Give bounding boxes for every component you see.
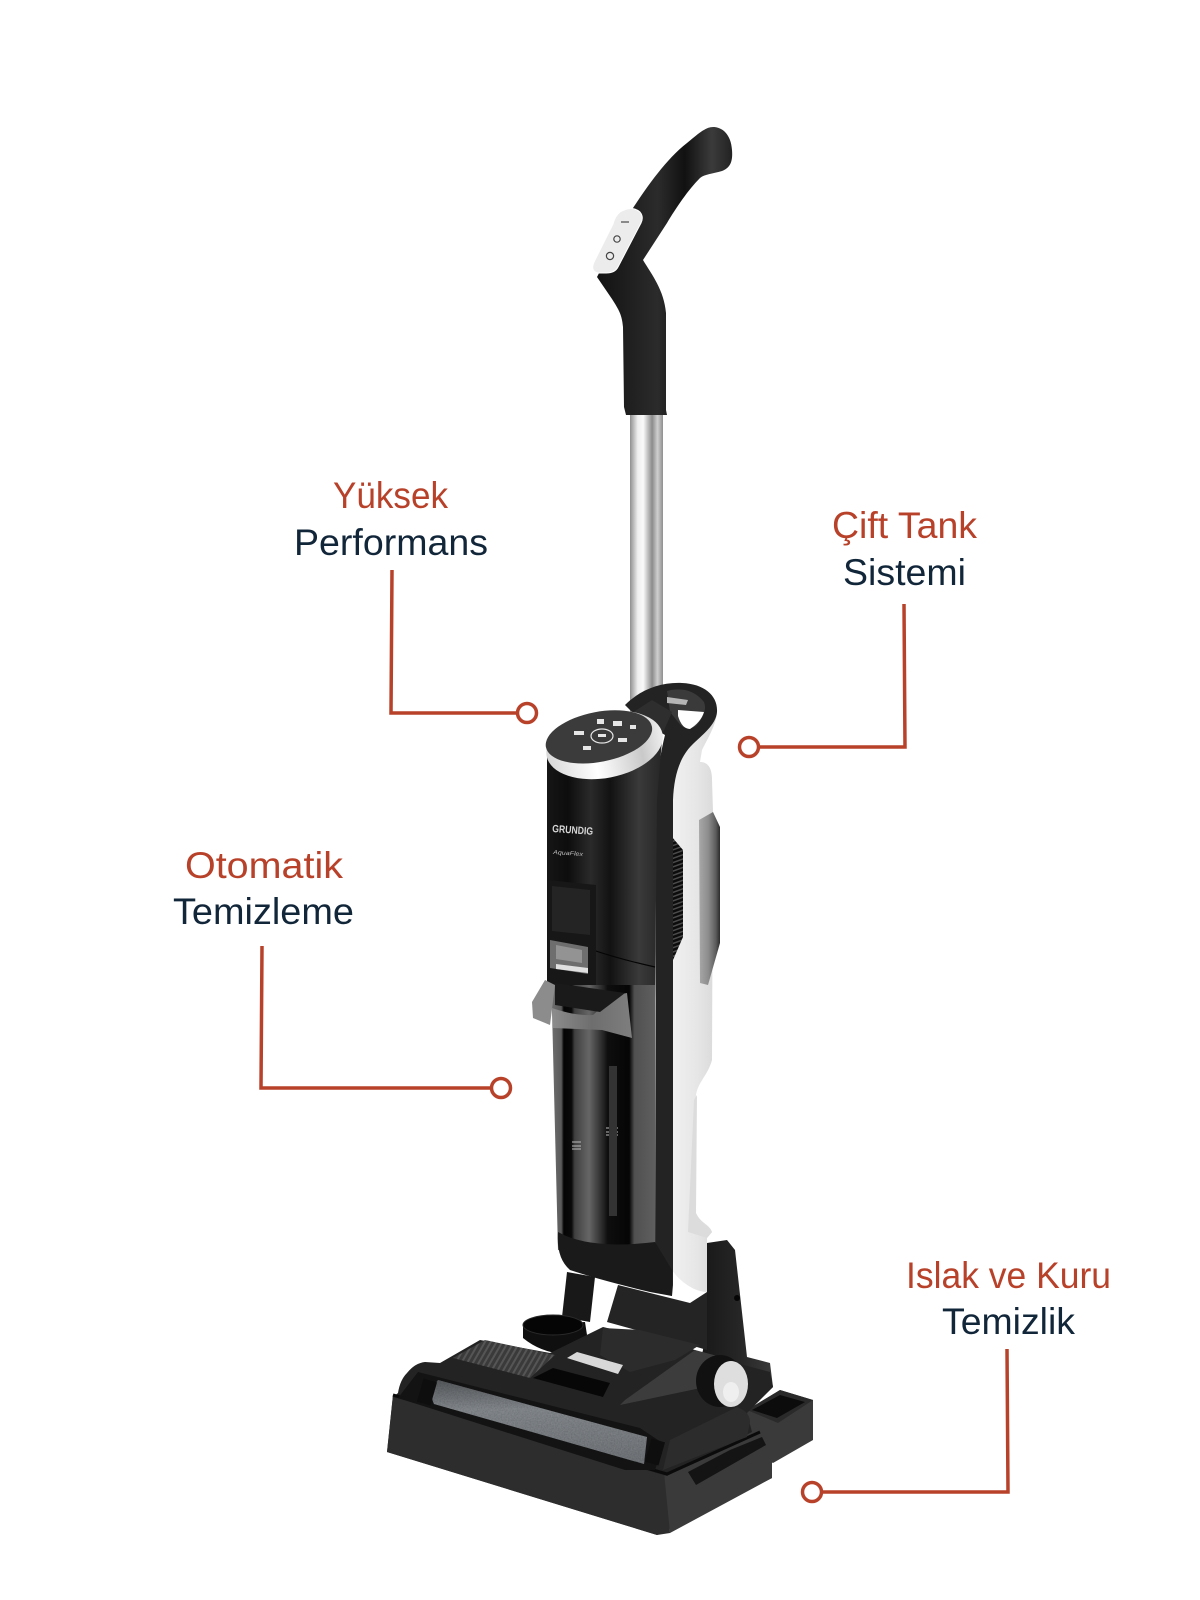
white rear housing: [668, 712, 717, 1292]
accessory cup: [523, 1315, 587, 1354]
callout heading: Otomatik: [185, 844, 343, 886]
roller front frame: [398, 1372, 664, 1470]
handle control panel: [593, 208, 642, 273]
callout: Otomatik Temizleme: [173, 844, 510, 1098]
main motor body: [547, 740, 662, 1000]
product line text: AquaFlex: [552, 850, 584, 858]
pedal arm: [620, 1350, 725, 1405]
handle grip: [597, 127, 732, 415]
rear neck: [562, 1272, 595, 1322]
head textured panel: [453, 1340, 555, 1378]
callout: Çift Tank Sistemi: [740, 504, 977, 756]
lower back contour: [688, 1095, 712, 1238]
right side accessory tray: [747, 1390, 813, 1463]
cleaning head: [393, 1327, 773, 1476]
brush slot: [533, 1368, 610, 1397]
carrying loop and spine: [625, 683, 717, 1296]
leader line with marker: [391, 570, 536, 722]
callout subheading: Performans: [294, 521, 488, 563]
callout: Yüksek Performans: [294, 474, 536, 722]
tank scale marks: [572, 1128, 618, 1149]
callout heading: Çift Tank: [832, 504, 977, 546]
front panel and gauge: [548, 880, 596, 992]
callout subheading: Temizlik: [942, 1300, 1075, 1342]
brand text: GRUNDIG: [552, 823, 594, 838]
silver plate: [567, 1352, 623, 1374]
head front hump: [663, 1407, 750, 1470]
clear water tank: [552, 985, 655, 1270]
body top control ring: [540, 700, 669, 789]
callout subheading: Sistemi: [843, 551, 966, 593]
body seam: [553, 935, 655, 967]
vacuum cleaner product illustration: [387, 127, 813, 1535]
head neck cover: [600, 1328, 700, 1372]
telescopic metal pole: [630, 415, 663, 725]
cleaning roller: [432, 1380, 647, 1464]
base tray: [387, 1395, 772, 1535]
tank inner tube: [609, 1066, 617, 1216]
leader line with marker: [740, 604, 905, 756]
side wheel: [696, 1355, 748, 1407]
callout: Islak ve Kuru Temizlik: [802, 1254, 1111, 1502]
leader line with marker: [261, 946, 510, 1098]
callout heading: Yüksek: [333, 474, 448, 516]
leader line with marker: [802, 1349, 1008, 1502]
tank holder tray: [532, 980, 632, 1038]
rear water tank window: [699, 812, 720, 985]
ventilation grille: [672, 837, 683, 960]
docking stand tower: [690, 1240, 773, 1412]
roller end caps: [417, 1379, 665, 1465]
callout subheading: Temizleme: [173, 890, 354, 932]
center joint neck: [607, 1285, 707, 1350]
base tray rim and handle: [393, 1395, 766, 1485]
tank base cup: [558, 1232, 672, 1296]
touch panel icons: [574, 719, 636, 750]
callout heading: Islak ve Kuru: [906, 1254, 1111, 1296]
